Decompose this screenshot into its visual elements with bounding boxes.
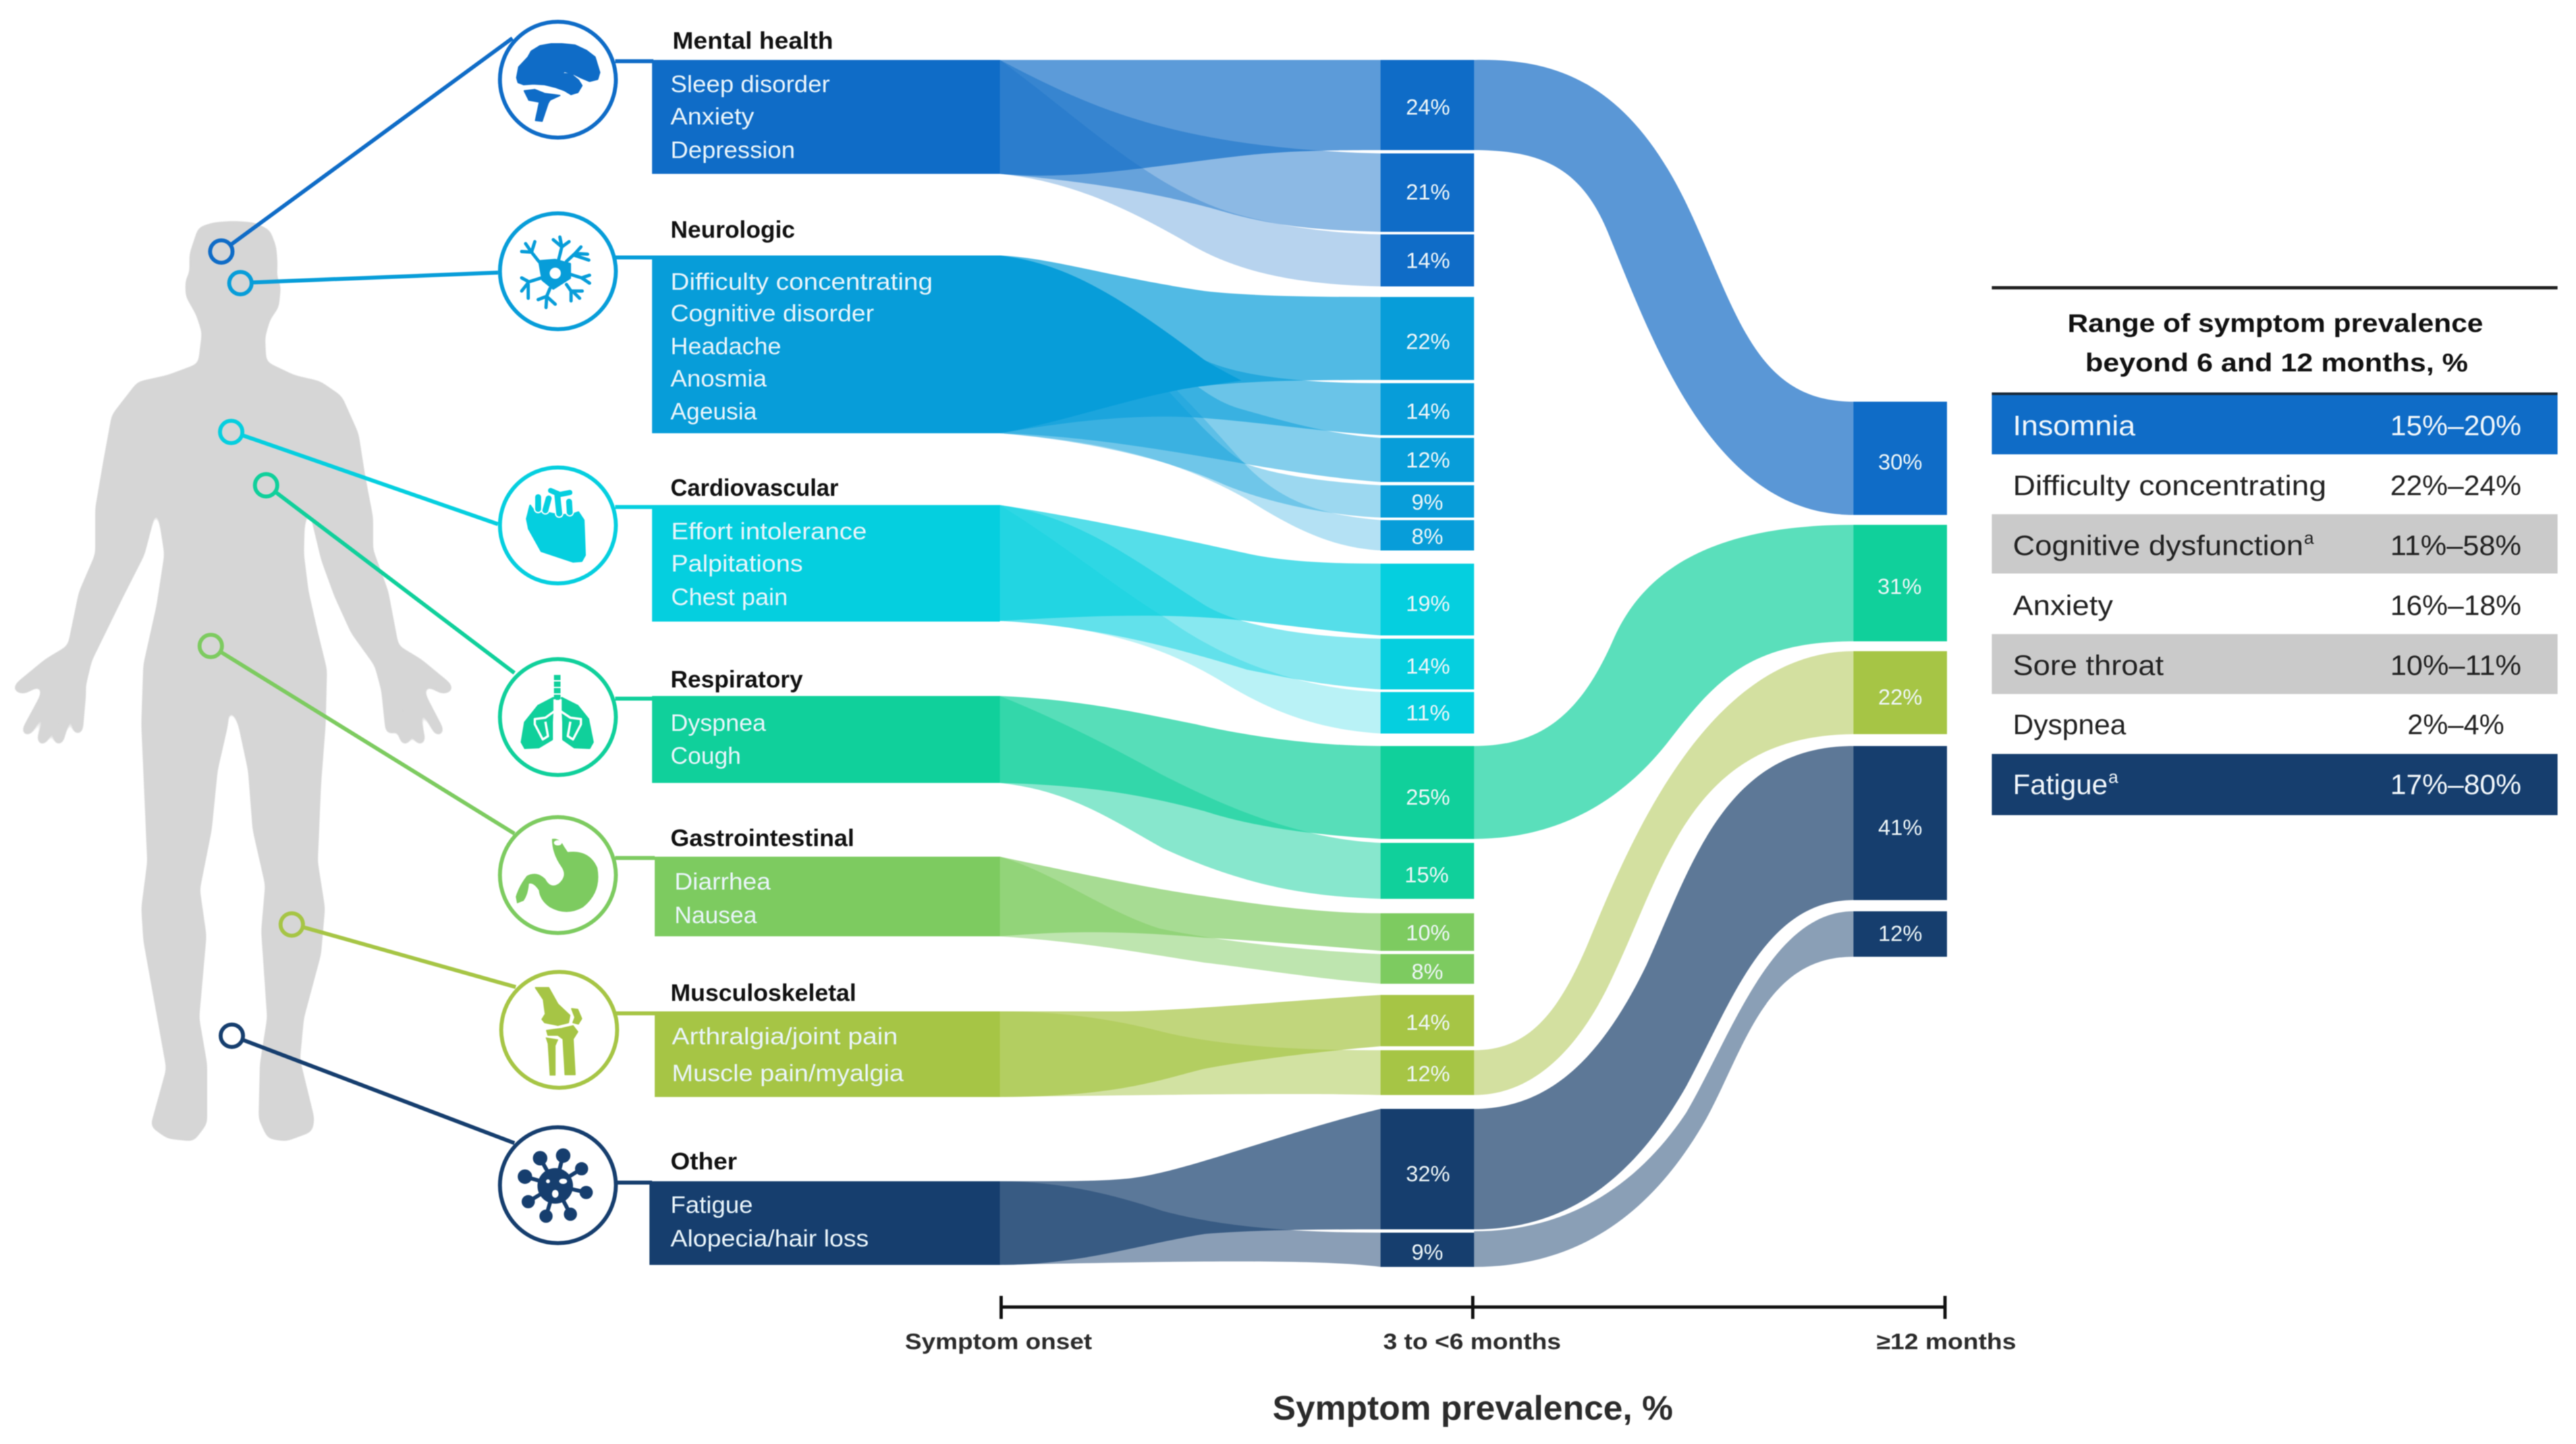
heading: other: Other — [671, 1148, 737, 1175]
flows: mental health — [1000, 60, 1381, 286]
symptom list: mental health: Anxiety — [671, 103, 754, 130]
time axis — [1001, 1296, 1945, 1319]
3 to 6 month bars: neurologic — [1381, 297, 1474, 550]
connector: other — [221, 1025, 652, 1183]
flows: other — [1000, 1109, 1381, 1267]
panel: neurologic — [652, 216, 1474, 550]
values: neurologic: 8% — [1411, 524, 1443, 548]
symptom list: neurologic: Ageusia — [671, 398, 757, 425]
icon: joint — [501, 972, 617, 1088]
values: respiratory: 25% — [1406, 785, 1450, 809]
human body silhouette — [14, 223, 452, 1140]
values: neurologic: 9% — [1411, 490, 1443, 514]
axis labels: 3 to <6 months — [1383, 1329, 1561, 1354]
heading: respiratory: Respiratory — [671, 666, 803, 693]
values: musculoskeletal: 14% — [1406, 1010, 1450, 1034]
symptom list: mental health — [671, 70, 830, 163]
row: insomnia — [1992, 395, 2558, 454]
values: other: 9% — [1411, 1240, 1443, 1264]
connector: cardiovascular — [220, 421, 653, 524]
row: difficulty concentrating: Difficulty concentrating — [2013, 470, 2326, 502]
values: mental health: 21% — [1406, 180, 1450, 204]
symptom list: mental health: Depression — [671, 136, 795, 163]
row: anxiety: 16%–18% — [2390, 590, 2521, 622]
source bar: respiratory — [652, 696, 1000, 783]
values: cardiovascular: 19% — [1406, 591, 1450, 616]
row: fatigue: a — [2108, 767, 2119, 787]
values: cardiovascular: 14% — [1406, 654, 1450, 678]
values: musculoskeletal — [1406, 1010, 1450, 1086]
panel: respiratory — [652, 666, 1474, 899]
connector: mental health — [210, 38, 653, 263]
icon: heart — [500, 468, 616, 583]
row: dyspnea: Dyspnea — [2013, 709, 2126, 741]
flow: fatigue to 12 months — [1474, 746, 1853, 1229]
row: fatigue: Fatigue — [2013, 769, 2108, 801]
heading: mental health: Mental health — [672, 27, 833, 54]
symptom list: other: Alopecia/hair loss — [671, 1225, 869, 1252]
values: cardiovascular: 11% — [1406, 701, 1450, 725]
heading: musculoskeletal: Musculoskeletal — [671, 979, 856, 1006]
values: cardiovascular — [1406, 591, 1450, 725]
values: gastrointestinal — [1406, 921, 1450, 984]
12 month values: 30% — [1878, 450, 1922, 474]
row: sore throat — [1992, 634, 2558, 694]
panel: musculoskeletal — [655, 979, 1474, 1097]
flows: respiratory — [1000, 696, 1381, 899]
symptom list: gastrointestinal — [674, 868, 771, 928]
symptom list: respiratory: Cough — [671, 742, 741, 769]
flow: alopecia to 12 months — [1474, 911, 1853, 1267]
row: anxiety: Anxiety — [2013, 590, 2114, 622]
values: respiratory — [1404, 785, 1450, 887]
axis labels: Symptom onset — [905, 1329, 1092, 1354]
3 to 6 month bars: other — [1381, 1109, 1474, 1267]
symptom list: neurologic: Difficulty concentrating — [671, 268, 933, 295]
symptom list: cardiovascular: Effort intolerance — [671, 518, 867, 545]
values: mental health — [1406, 95, 1450, 273]
symptom list: respiratory — [671, 709, 767, 769]
symptom list: gastrointestinal: Nausea — [674, 901, 757, 928]
values: respiratory: 15% — [1404, 863, 1449, 887]
symptom list: musculoskeletal: Muscle pain/myalgia — [672, 1059, 904, 1086]
symptom list: neurologic — [671, 268, 933, 425]
values: neurologic: 22% — [1406, 329, 1450, 354]
icon: lungs — [500, 659, 616, 775]
table title — [2068, 309, 2483, 377]
12 month values: 41% — [1878, 815, 1922, 840]
symptom list: cardiovascular: Palpitations — [671, 550, 803, 577]
3 to 6 month bars: mental health — [1381, 60, 1474, 286]
row: difficulty concentrating: 22%–24% — [2390, 470, 2521, 502]
table: range of symptom prevalence — [1992, 288, 2558, 815]
12 month values: 22% — [1878, 685, 1922, 709]
12 month bars — [1853, 402, 1947, 957]
values: musculoskeletal: 12% — [1406, 1061, 1450, 1086]
panel: gastrointestinal — [655, 824, 1474, 984]
symptom list: cardiovascular: Chest pain — [671, 583, 788, 610]
table title: Range of symptom prevalence — [2068, 309, 2483, 338]
symptom list: other: Fatigue — [671, 1191, 753, 1218]
symptom list: neurologic: Headache — [671, 333, 781, 360]
heading: cardiovascular: Cardiovascular — [671, 474, 838, 501]
connector: respiratory — [255, 474, 653, 699]
values: neurologic: 14% — [1406, 399, 1450, 423]
12 month values: 12% — [1878, 921, 1922, 946]
icon: brain — [500, 22, 616, 138]
row: insomnia: 15%–20% — [2390, 410, 2521, 442]
row: cognitive dysfunction: Cognitive dysfunction — [2013, 530, 2303, 562]
source bar: other — [649, 1181, 1000, 1265]
flows: gastrointestinal — [1000, 857, 1381, 984]
connector: neurologic — [229, 257, 653, 294]
panel: cardiovascular — [652, 474, 1474, 734]
source bar: musculoskeletal — [655, 1011, 1000, 1097]
flows: neurologic — [1000, 255, 1381, 550]
axis labels: ≥12 months — [1877, 1329, 2016, 1354]
row: anxiety — [2013, 590, 2521, 622]
3 to 6 month bars: respiratory — [1381, 746, 1474, 899]
values: neurologic: 12% — [1406, 448, 1450, 472]
flows: cardiovascular — [1000, 505, 1381, 734]
row: fatigue: 17%–80% — [2390, 769, 2521, 801]
axis title: Symptom prevalence, % — [1273, 1389, 1673, 1428]
heading: gastrointestinal: Gastrointestinal — [671, 824, 854, 851]
icon: virus — [500, 1127, 616, 1243]
symptom list: respiratory: Dyspnea — [671, 709, 767, 736]
panel: mental health — [652, 27, 1474, 286]
values: gastrointestinal: 10% — [1406, 921, 1450, 945]
row: sore throat: 10%–11% — [2390, 650, 2521, 682]
symptom list: musculoskeletal: Arthralgia/joint pain — [672, 1023, 898, 1050]
values: gastrointestinal: 8% — [1411, 959, 1443, 984]
symptom list: neurologic: Cognitive disorder — [671, 300, 874, 327]
source bar: cardiovascular — [652, 505, 1000, 622]
row: cognitive dysfunction — [1992, 514, 2558, 574]
flow: musculoskeletal to 12 months — [1474, 651, 1853, 1095]
values: other — [1406, 1162, 1450, 1264]
12 month values: 31% — [1877, 574, 1922, 599]
row: difficulty concentrating — [2013, 470, 2521, 502]
symptom list: musculoskeletal — [672, 1023, 904, 1086]
row: sore throat: Sore throat — [2013, 650, 2164, 682]
3 to 6 month bars: cardiovascular — [1381, 564, 1474, 734]
values: neurologic — [1406, 329, 1450, 548]
flow: respiratory to 12 months — [1474, 525, 1853, 839]
table title: beyond 6 and 12 months, % — [2085, 349, 2468, 377]
axis labels — [905, 1329, 2016, 1354]
values: other: 32% — [1406, 1162, 1450, 1186]
12 month values — [1877, 450, 1922, 946]
flows: musculoskeletal — [1000, 995, 1381, 1097]
symptom list: cardiovascular — [671, 518, 867, 610]
3 to 6 month bars: gastrointestinal — [1381, 913, 1474, 984]
connector: musculoskeletal — [281, 913, 655, 1013]
symptom list: neurologic: Anosmia — [671, 365, 767, 392]
row: dyspnea — [2013, 709, 2504, 741]
row: cognitive dysfunction: 11%–58% — [2390, 530, 2521, 562]
3 to 6 month bars: musculoskeletal — [1381, 995, 1474, 1095]
heading: neurologic: Neurologic — [671, 216, 795, 243]
icon: stomach — [500, 817, 616, 933]
values: mental health: 14% — [1406, 248, 1450, 273]
row: insomnia: Insomnia — [2013, 410, 2135, 442]
source bar: gastrointestinal — [655, 857, 1000, 936]
symptom list: mental health: Sleep disorder — [671, 70, 830, 97]
connector: gastrointestinal — [200, 635, 655, 858]
panel: other — [649, 1109, 1474, 1267]
source bar: neurologic — [652, 255, 1000, 433]
flow: mental health to 12 months — [1474, 60, 1853, 515]
row: cognitive dysfunction: a — [2304, 528, 2315, 548]
row: dyspnea: 2%–4% — [2407, 709, 2504, 741]
row: fatigue — [1992, 754, 2558, 815]
values: mental health: 24% — [1406, 95, 1450, 119]
symptom list: gastrointestinal: Diarrhea — [674, 868, 771, 895]
symptom list: other — [671, 1191, 869, 1252]
source bar: mental health — [652, 60, 1000, 174]
icon: neuron — [500, 213, 616, 329]
